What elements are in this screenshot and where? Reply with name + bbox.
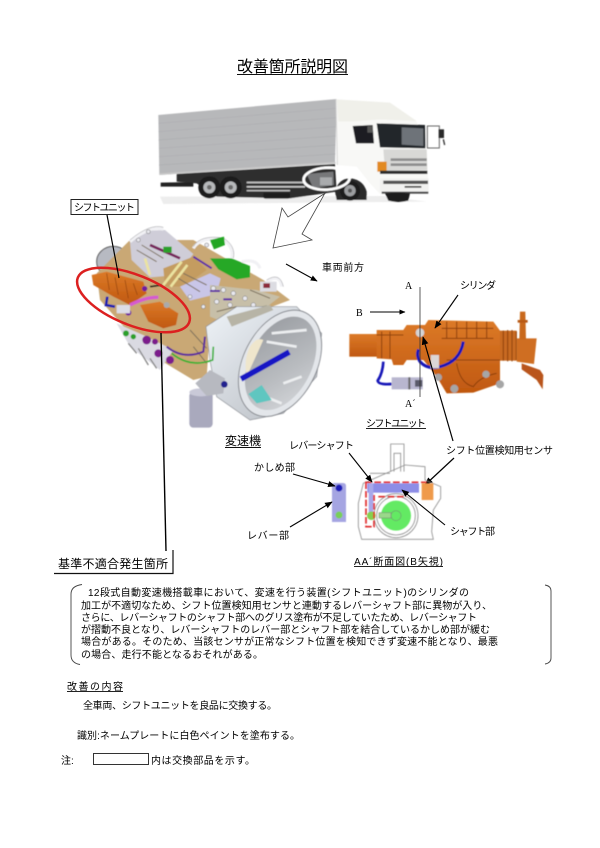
arrow: shaft part bbox=[402, 490, 445, 525]
label: lever shaft: レバーシャフト bbox=[289, 440, 354, 452]
callout: nonconformity location: 基準不適合発生箇所 bbox=[58, 556, 168, 571]
arrow: caulking part bbox=[293, 474, 335, 486]
rear cover bbox=[97, 246, 130, 277]
hollow arrow to transmission bbox=[273, 192, 327, 248]
defect description with brackets: 12段式自動変速機搭載車において、変速を行う装置(シフトユニット)のシリンダの bbox=[88, 586, 469, 599]
arrow: vehicle front bbox=[286, 264, 317, 281]
lever part bbox=[332, 483, 346, 522]
text: replacement: 全車両、シフトユニットを良品に交換する。 bbox=[83, 699, 277, 712]
label: lever part: レバー部 bbox=[247, 530, 289, 542]
label: cylinder: シリンダ bbox=[460, 279, 496, 292]
text: identification: 識別:ネームプレートに白色ペイントを塗布する。 bbox=[77, 729, 300, 742]
arrow: B view bbox=[370, 311, 405, 313]
orange shift unit bbox=[92, 272, 178, 328]
arrow: cylinder bbox=[435, 295, 458, 328]
label: B: B bbox=[356, 308, 363, 319]
defect description with brackets: さらに、レバーシャフトのシャフト部へのグリス塗布が不足していたため、レバーシャフト bbox=[81, 611, 477, 624]
leader: shift unit bbox=[107, 215, 119, 278]
arrow: sensor on section bbox=[425, 458, 454, 485]
cross-section drawing bbox=[358, 444, 441, 539]
label: caulking part: かしめ部 bbox=[254, 462, 295, 474]
arrow: lever shaft bbox=[349, 453, 372, 482]
label: shift unit: シフトユニット bbox=[74, 203, 135, 214]
oil filter bbox=[189, 370, 228, 428]
heading: improvement details: 改善の内容 bbox=[67, 680, 123, 693]
label: shift position sensor: シフト位置検知用センサ bbox=[446, 444, 553, 457]
defect description with brackets: 加工が不適切なため、シフト位置検知用センサと連動するレバーシャフト部に異物が入り、 bbox=[81, 599, 492, 612]
section line AA bbox=[419, 287, 421, 397]
defect description with brackets: の場合、走行不能となるおそれがある。 bbox=[81, 648, 263, 661]
input shaft bbox=[241, 352, 289, 379]
upper valve parts bbox=[130, 227, 283, 363]
lower harness bbox=[117, 323, 213, 370]
defect description with brackets bbox=[71, 584, 551, 664]
shift unit drawing bbox=[349, 312, 543, 393]
label: shift unit caption: シフトユニット bbox=[366, 419, 426, 430]
label: section caption: AA´断面図(B矢視) bbox=[354, 555, 443, 568]
gear case bbox=[97, 240, 290, 380]
label: shaft part: シャフト部 bbox=[450, 526, 495, 538]
label: transmission: 変速機 bbox=[225, 433, 261, 448]
label: vehicle front: 車両前方 bbox=[322, 261, 364, 274]
transmission drawing bbox=[92, 227, 338, 430]
leader: nonconformity location bbox=[161, 333, 166, 551]
teal cone bbox=[248, 385, 272, 403]
note: legend: 注: bbox=[61, 754, 74, 767]
note: legend: 内は交換部品を示す。 bbox=[151, 754, 255, 767]
defect description with brackets: が摺動不良となり、レバーシャフトのレバー部とシャフト部を結合しているかしめ部が緩む bbox=[81, 623, 490, 636]
title: 改善箇所説明図 bbox=[237, 58, 348, 76]
label: shift unit bbox=[71, 200, 138, 214]
truck photo bbox=[158, 99, 445, 204]
callout: nonconformity location bbox=[54, 550, 173, 574]
note: legend bbox=[61, 754, 255, 767]
bell housing bbox=[206, 307, 322, 420]
defect description with brackets: 場合がある。そのため、当該センサが正常なシフト位置を検知できず変速不能となり、最悪 bbox=[81, 635, 498, 648]
label: A prime: A´ bbox=[405, 399, 416, 410]
label: A: A bbox=[405, 281, 413, 292]
red ellipse marker bbox=[69, 254, 198, 346]
arrow: sensor on unit bbox=[423, 337, 453, 441]
arrow: lever part bbox=[290, 502, 332, 527]
